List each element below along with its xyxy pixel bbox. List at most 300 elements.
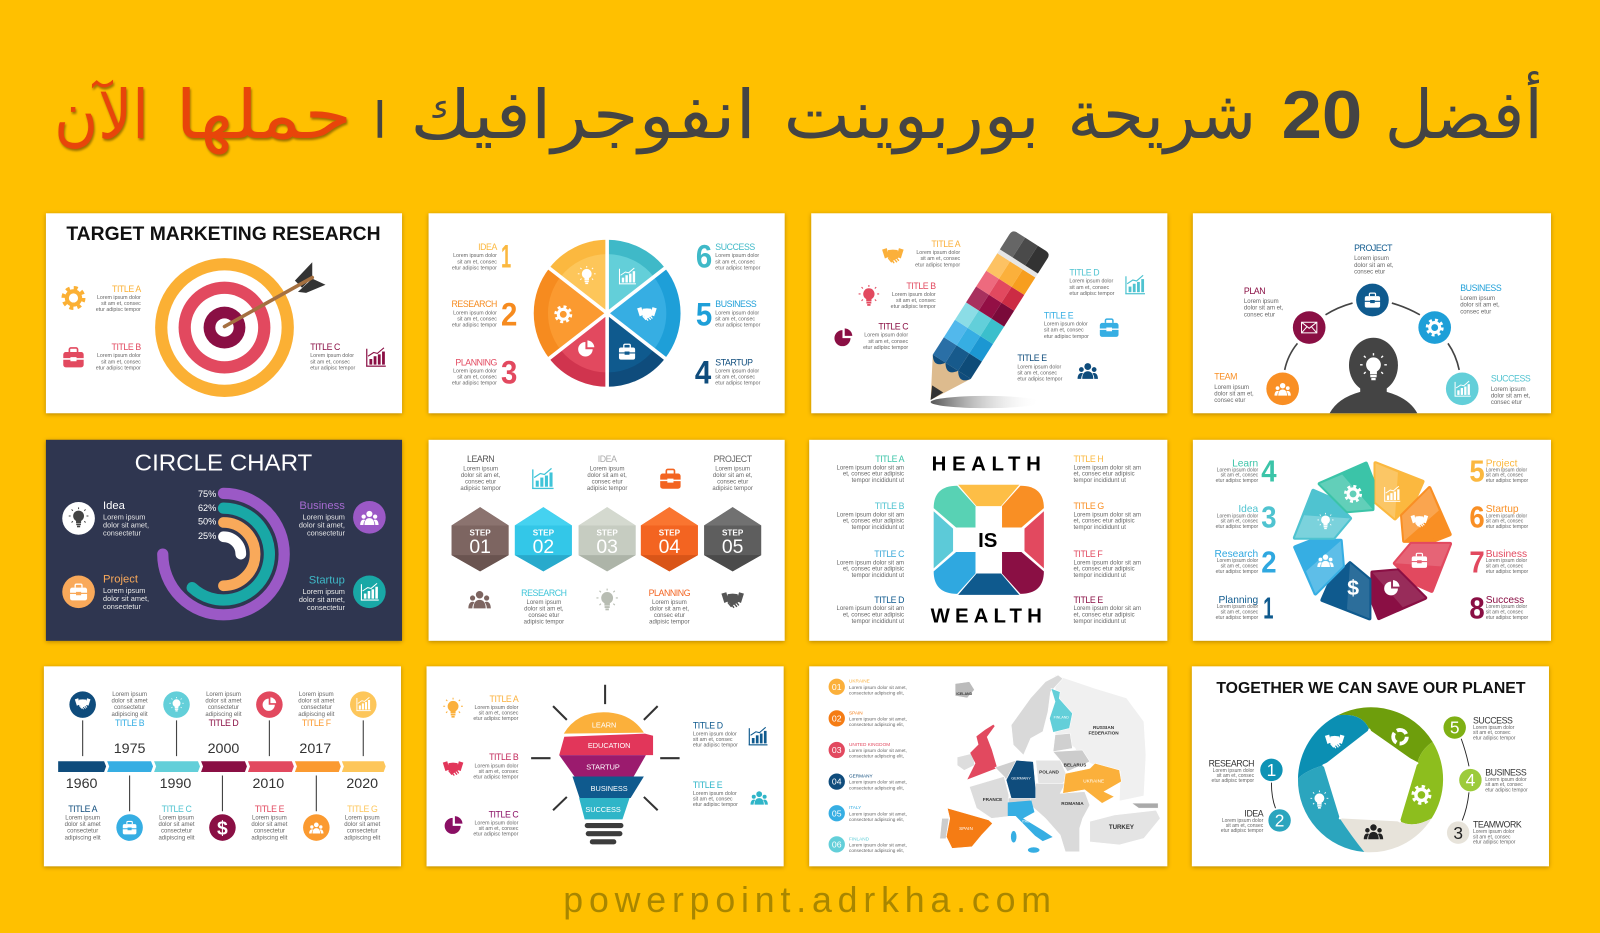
- number badge 1: 1: [1267, 760, 1276, 780]
- text: title g: TITLE G: [1073, 501, 1104, 511]
- text: research: 2: [501, 296, 517, 333]
- text: learn: [1216, 455, 1277, 489]
- text: team: [1214, 372, 1254, 404]
- list item 06: consectetur adipiscing elit,: [849, 848, 904, 853]
- text: project: dolor sit am et,: [1354, 263, 1394, 269]
- text: title b: TITLE B: [875, 501, 905, 511]
- years: 1975: [114, 741, 146, 757]
- list item 03: 03: [832, 745, 842, 755]
- text: idea: Lorem ipsum dolor: [1222, 818, 1263, 824]
- text: business: [1485, 768, 1528, 793]
- text: title a: Lorem ipsum dolor: [97, 295, 141, 301]
- text: title c: etur adipisc tempor: [863, 345, 908, 351]
- text: success: 8: [1469, 591, 1485, 625]
- text: title d: TITLE D: [209, 718, 238, 728]
- text: startup: [299, 575, 345, 612]
- text: idea: 3: [1261, 501, 1277, 535]
- text: title c: Lorem ipsum: [159, 815, 194, 821]
- text: business: Lorem ipsum: [1460, 296, 1495, 302]
- text: title b: [891, 281, 936, 310]
- icon: people: [1078, 363, 1098, 379]
- text: title b: Lorem ipsum dolor: [892, 292, 936, 298]
- text: title a: etur adipisc tempor: [473, 716, 519, 722]
- text: planning: Lorem ipsum dolor: [453, 368, 497, 374]
- text: title a: TITLE A: [875, 454, 905, 464]
- text: title f: TITLE F: [1073, 549, 1102, 559]
- text: startup: Startup: [1486, 504, 1519, 515]
- text: learn: Lorem ipsum: [463, 466, 498, 472]
- text: title h: TITLE H: [1073, 454, 1103, 464]
- text: title a: TITLE A: [68, 804, 98, 814]
- step 02: STEP: [533, 529, 555, 538]
- number badge 4: [1459, 769, 1482, 791]
- text: title b: TITLE B: [906, 281, 936, 291]
- node: handshake: [69, 691, 96, 718]
- text: planning: sit am et, consec: [1221, 609, 1259, 615]
- text: business: Lorem ipsum dolor: [1486, 558, 1527, 564]
- text: title e navy: TITLE E: [1017, 353, 1047, 363]
- list item 06: FINLAND: [849, 836, 870, 841]
- text: title f: tempor incididunt ut: [1073, 573, 1126, 579]
- list item 02: SPAIN: [849, 710, 863, 715]
- text: success: Lorem ipsum dolor: [1486, 604, 1527, 610]
- text: planning: etur adipisc tempor: [452, 381, 497, 387]
- text: learn: dolor sit am et,: [461, 473, 501, 479]
- list item 03: [829, 742, 907, 759]
- text: title f: Lorem ipsum: [299, 692, 334, 698]
- text: title a: et, consec etur adipisic: [843, 472, 904, 478]
- text: project: Project: [103, 574, 139, 586]
- text: title d: Lorem ipsum dolor: [693, 732, 737, 738]
- panel: step hexagons: [429, 440, 785, 641]
- text: startup: Lorem ipsum dolor: [1486, 513, 1527, 519]
- text: idea: sit am et, consec: [1226, 823, 1264, 829]
- text: title d: sit am et, consec: [1069, 285, 1109, 291]
- years: 1990: [160, 776, 191, 792]
- map labels: ROMANIA: [1061, 801, 1084, 806]
- percent labels: 62%: [198, 503, 216, 513]
- layer labels: SUCCESS: [585, 805, 621, 814]
- ring diagram: [1282, 451, 1463, 631]
- icon: briefcase: [660, 469, 681, 489]
- text: title e: [693, 780, 738, 808]
- text: research: 2: [1261, 545, 1277, 579]
- text: project: dolor sit am et,: [713, 473, 753, 479]
- text: title f: et, consec etur adipisic: [1073, 567, 1135, 573]
- map labels: BELARUS: [1064, 762, 1086, 767]
- text: title b: Lorem ipsum dolor: [474, 763, 518, 769]
- text: planning: sit am et, consec: [457, 375, 497, 381]
- icon: handshake: [882, 248, 904, 263]
- text: title e: dolor sit amet: [251, 822, 288, 828]
- text: title a: [96, 284, 141, 313]
- text: idea: consectetur: [103, 529, 142, 538]
- panel: light bulb: [427, 666, 784, 866]
- bulb rays: [531, 685, 680, 810]
- radial bars: [163, 493, 284, 615]
- percent labels: [198, 489, 216, 541]
- text: research: sit am et, consec: [1221, 564, 1259, 570]
- text: title e: adipiscing elit: [251, 835, 288, 841]
- text: success: SUCCESS: [1473, 715, 1513, 725]
- text: idea: [452, 237, 511, 274]
- text: title g: dolor sit amet: [344, 822, 381, 828]
- text: title d: [205, 692, 242, 728]
- panel: pencil: [811, 213, 1167, 413]
- text: startup: etur adipisc tempor: [1486, 524, 1529, 530]
- number badge 2: 2: [1275, 811, 1284, 831]
- list item 05: Lorem ipsum dolor sit amet,: [849, 811, 907, 816]
- text: project: [1469, 455, 1529, 489]
- text: title e: [1073, 595, 1141, 625]
- text: startup: sit am et, consec: [715, 375, 755, 381]
- text: startup: consectetur: [307, 603, 345, 612]
- list item 01: Lorem ipsum dolor sit amet,: [849, 685, 907, 690]
- icon: chart: [1125, 275, 1145, 294]
- list item 06: Lorem ipsum dolor sit amet,: [849, 842, 907, 847]
- text: title e navy: etur adipisc tempor: [1017, 377, 1063, 383]
- text: business: consectetur: [307, 529, 345, 538]
- text: planning: consec etur: [654, 613, 685, 619]
- icon: idea: [62, 502, 95, 535]
- node: project: [1356, 284, 1389, 316]
- text: title e blue: etur adipisc tempor: [1044, 334, 1089, 340]
- text: idea: etur adipisc tempor: [452, 265, 497, 271]
- text: business: etur adipisc tempor: [1485, 787, 1528, 793]
- text: success: SUCCESS: [715, 242, 755, 252]
- text: idea: [1216, 501, 1277, 535]
- text: idea: Lorem ipsum dolor: [1217, 513, 1258, 519]
- text: title a: sit am et, consec: [479, 711, 519, 717]
- panel: timeline: [44, 666, 401, 866]
- text: research: etur adipisc tempor: [452, 323, 497, 329]
- text: title b: tempor incididunt ut: [852, 525, 904, 531]
- step 05: 05: [722, 536, 743, 558]
- text: research: RESEARCH: [1209, 758, 1254, 768]
- text: title b: dolor sit amet: [112, 699, 148, 705]
- text: team: Lorem ipsum: [1214, 385, 1249, 391]
- text: title b: Lorem ipsum: [112, 692, 147, 698]
- text: startup: sit am et, consec: [1486, 519, 1524, 525]
- text: business: BUSINESS: [715, 299, 757, 309]
- map labels: SPAIN: [959, 826, 973, 831]
- node: business: [1418, 311, 1451, 344]
- text: startup: 4: [695, 354, 711, 391]
- text: title e navy: sit am et, consec: [1017, 370, 1057, 376]
- text: business: [1469, 545, 1529, 579]
- text: research: RESEARCH: [521, 588, 567, 598]
- text: learn: sit am et, consec: [1221, 473, 1259, 479]
- map labels: UKRAINE: [1083, 779, 1104, 784]
- text: success: [696, 237, 761, 274]
- text: research: adipisic tempor: [524, 620, 564, 626]
- panel heading: TARGET MARKETING RESEARCH: [66, 223, 381, 245]
- text: title a: sit am et, consec: [920, 256, 961, 262]
- text: title a: dolor sit amet: [65, 822, 101, 828]
- icon: handshake: [443, 761, 463, 775]
- text: learn: LEARN: [467, 454, 494, 464]
- text: title a: tempor incididunt ut: [852, 478, 904, 484]
- text: plan: PLAN: [1244, 286, 1265, 296]
- text: title d: etur adipisc tempor: [1069, 291, 1115, 297]
- text: research: Research: [1215, 549, 1258, 560]
- percent labels: 50%: [198, 516, 216, 526]
- text: business: [696, 296, 761, 333]
- timeline bar: [58, 761, 386, 772]
- wheel chart: [534, 237, 681, 390]
- icon: bulb: [859, 285, 879, 306]
- text: title a: sit am et, consec: [101, 301, 141, 307]
- text: business: dolor sit amet,: [299, 521, 345, 530]
- title: حملها: [176, 75, 352, 155]
- text: title a: TITLE A: [931, 239, 961, 249]
- text: project: [103, 574, 149, 611]
- text: business: BUSINESS: [1485, 768, 1527, 778]
- text: business: Business: [299, 500, 345, 512]
- list item 02: consectetur adipiscing elit,: [849, 722, 904, 727]
- panel: europe map: [809, 666, 1167, 866]
- text: success: etur adipisc tempor: [1473, 735, 1516, 741]
- octagon diagram: [934, 485, 1044, 595]
- icon: bulb: [596, 589, 618, 610]
- text: success: 6: [696, 237, 712, 274]
- text: idea: dolor sit amet,: [103, 521, 149, 530]
- list item 02: Lorem ipsum dolor sit amet,: [849, 716, 907, 721]
- text: title a: [915, 239, 961, 268]
- map labels: RUSSIAN: [1093, 725, 1115, 730]
- icon: startup: [353, 576, 386, 608]
- text: title c: dolor sit amet: [158, 822, 195, 828]
- text: idea: IDEA: [478, 242, 497, 252]
- text: title c: Lorem ipsum dolor sit am: [837, 560, 904, 566]
- text: plan: dolor sit am et,: [1244, 306, 1284, 312]
- node: dollar: [209, 814, 236, 841]
- step 04: [641, 507, 698, 571]
- list item 05: ITALY: [849, 805, 862, 810]
- map labels: FRANCE: [983, 797, 1002, 802]
- list item 05: 05: [832, 808, 842, 818]
- years: 2000: [208, 741, 239, 757]
- text: title b: consectetur: [114, 705, 145, 711]
- text: title c: TITLE C: [310, 342, 340, 352]
- layer labels: LEARN: [592, 721, 616, 730]
- text: title c: etur adipisc tempor: [473, 832, 519, 838]
- text: title b: [96, 342, 141, 371]
- title: انفوجرافيك: [410, 75, 756, 155]
- text: title c: Lorem ipsum dolor: [864, 333, 908, 339]
- years: 1960: [66, 776, 98, 792]
- list item 03: consectetur adipiscing elit,: [849, 754, 904, 759]
- text: business: [1460, 283, 1502, 315]
- text: team: TEAM: [1214, 372, 1237, 382]
- step 03: STEP: [596, 529, 618, 538]
- text: teamwork: Lorem ipsum dolor: [1473, 829, 1514, 835]
- text: title g: Lorem ipsum dolor sit am: [1073, 512, 1141, 518]
- text: title d: [693, 721, 738, 749]
- text: title b: etur adipisc tempor: [96, 365, 141, 371]
- text: idea: Lorem ipsum: [590, 466, 625, 472]
- text: title e: [251, 804, 288, 841]
- panel heading: CIRCLE CHART: [135, 449, 312, 475]
- text: title b: sit am et, consec: [896, 298, 936, 304]
- list item 04: Lorem ipsum dolor sit amet,: [849, 780, 907, 785]
- text: title b: sit am et, consec: [101, 359, 141, 365]
- pencil: [912, 230, 1050, 412]
- text: business: Business: [1486, 549, 1527, 560]
- text: title g: adipiscing elit: [344, 835, 381, 841]
- text: business: 5: [696, 296, 712, 333]
- text: success: SUCCESS: [1491, 374, 1531, 384]
- text: plan: Lorem ipsum: [1244, 299, 1279, 305]
- panel: save our planet: [1192, 666, 1549, 866]
- map labels: [956, 692, 1134, 831]
- step 04: STEP: [659, 529, 681, 538]
- text: title d: TITLE D: [1069, 268, 1099, 278]
- text: idea: 1: [501, 237, 511, 274]
- years: [66, 741, 378, 792]
- text: startup: dolor sit amet,: [299, 595, 345, 604]
- text: idea: IDEA: [1244, 808, 1264, 818]
- icon: project: [62, 576, 95, 608]
- icon: chart: [366, 348, 386, 367]
- text: title c: Lorem ipsum dolor: [310, 353, 354, 359]
- text: title e: sit am et, consec: [693, 796, 733, 802]
- text: title c: TITLE C: [162, 804, 191, 814]
- text: title d: [1069, 268, 1115, 297]
- panel: eight piece ring: [1193, 440, 1551, 641]
- text: title h: tempor incididunt ut: [1073, 478, 1126, 484]
- text: title d: TITLE D: [874, 595, 904, 605]
- icon: pie: [445, 816, 462, 834]
- node: pie: [256, 691, 283, 718]
- step 05: STEP: [722, 529, 744, 538]
- text: success: etur adipisc tempor: [715, 265, 761, 271]
- text: title g: [1073, 501, 1141, 531]
- map labels: GERMANY: [1011, 776, 1031, 781]
- text: idea: Idea: [1238, 504, 1258, 515]
- text: research: [1215, 545, 1277, 579]
- text: success: Lorem ipsum dolor: [715, 253, 759, 259]
- text: title e: Lorem ipsum dolor sit am: [1073, 606, 1141, 612]
- number badge 3: 3: [1453, 823, 1463, 843]
- text: business: sit am et, consec: [715, 316, 755, 322]
- head silhouette: [1330, 338, 1417, 413]
- text: planning: Lorem ipsum: [652, 600, 687, 606]
- text: business: Lorem ipsum: [303, 512, 345, 521]
- panel: head with ideas: [1193, 213, 1551, 413]
- text: title b: TITLE B: [112, 342, 141, 352]
- text: title c: TITLE C: [874, 549, 904, 559]
- text: research: [521, 588, 567, 626]
- number badge 2: [1268, 809, 1291, 832]
- text: title a: adipiscing elit: [65, 835, 101, 841]
- text: idea: adipisic tempor: [587, 486, 627, 492]
- list item 01: 01: [832, 682, 842, 692]
- text: title a: Lorem ipsum dolor sit am: [837, 465, 904, 471]
- text: team: dolor sit am et,: [1214, 391, 1254, 397]
- node: briefcase: [116, 814, 143, 841]
- star ring: [1298, 707, 1443, 852]
- text: idea: Lorem ipsum dolor: [453, 253, 497, 259]
- text: idea: Idea: [103, 500, 126, 512]
- node: dollar: $: [217, 818, 228, 840]
- text: business: sit am et, consec: [1485, 782, 1523, 788]
- text: title c: consectetur: [161, 829, 192, 835]
- text: startup: Lorem ipsum dolor: [715, 368, 759, 374]
- text: title a: Lorem ipsum dolor: [474, 705, 518, 711]
- text: project: PROJECT: [1354, 243, 1393, 253]
- text: title f: Lorem ipsum dolor sit am: [1073, 560, 1141, 566]
- panel: health is wealth: [809, 440, 1167, 641]
- list item 06: 06: [832, 839, 842, 849]
- map labels: ITALY: [1022, 819, 1032, 823]
- text: project: adipisic tempor: [712, 486, 753, 492]
- text: title e: consectetur: [254, 829, 285, 835]
- step 01: [452, 507, 509, 571]
- node: plan: [1293, 311, 1326, 344]
- text: title a: TITLE A: [490, 694, 519, 704]
- list item 01: consectetur adipiscing elit,: [849, 690, 904, 695]
- step 02: [515, 507, 572, 571]
- text: project: 5: [1469, 455, 1485, 489]
- ring icons: $: [1347, 576, 1359, 600]
- text: startup: Startup: [309, 575, 345, 587]
- text: title a: TITLE A: [112, 284, 141, 294]
- text: business: etur adipisc tempor: [715, 323, 761, 329]
- text: teamwork: TEAMWORK: [1473, 820, 1522, 830]
- percent labels: 25%: [198, 531, 216, 541]
- text: title b: TITLE B: [115, 718, 145, 728]
- bulb layers: [559, 712, 653, 844]
- text: title c: adipiscing elit: [158, 835, 195, 841]
- text: project: sit am et, consec: [1486, 473, 1524, 479]
- list item 05: [829, 805, 907, 822]
- text: idea: consec etur: [592, 479, 623, 485]
- text: title d: etur adipisc tempor: [693, 743, 738, 749]
- text: title g: et, consec etur adipisic: [1073, 519, 1135, 525]
- text: research: [451, 296, 517, 333]
- text: title c: [837, 549, 904, 579]
- icon: chart: [532, 468, 554, 489]
- text: title a: etur adipisc tempor: [96, 307, 141, 313]
- text: title h: [1073, 454, 1141, 484]
- text: success: etur adipisc tempor: [1486, 615, 1529, 621]
- text: title d: tempor incididunt ut: [852, 619, 904, 625]
- text: research: sit am et, consec: [1217, 773, 1255, 779]
- text: learn: Lorem ipsum dolor: [1217, 467, 1258, 473]
- step 04: 04: [659, 536, 680, 558]
- text: startup: [695, 354, 761, 391]
- number badge 4: 4: [1466, 770, 1476, 790]
- icon: bulb: [443, 698, 463, 718]
- text: title e: tempor incididunt ut: [1073, 619, 1126, 625]
- text: title e: et, consec etur adipisic: [1073, 613, 1135, 619]
- title: 20: [1282, 78, 1362, 153]
- layer labels: BUSINESS: [591, 784, 628, 793]
- list item 04: [829, 773, 907, 790]
- title: الآن: [54, 75, 149, 154]
- text: title g: tempor incididunt ut: [1073, 525, 1126, 531]
- target rings: [155, 258, 294, 397]
- text: title e: Lorem ipsum dolor: [693, 791, 737, 797]
- step 03: [579, 507, 636, 571]
- text: idea: etur adipisc tempor: [1221, 828, 1264, 834]
- text: success: Lorem ipsum dolor: [1473, 725, 1514, 731]
- text: project: etur adipisc tempor: [1486, 478, 1529, 484]
- text: title f: [298, 692, 335, 728]
- text: success: sit am et, consec: [1473, 730, 1511, 736]
- text: title e navy: Lorem ipsum dolor: [1017, 364, 1061, 370]
